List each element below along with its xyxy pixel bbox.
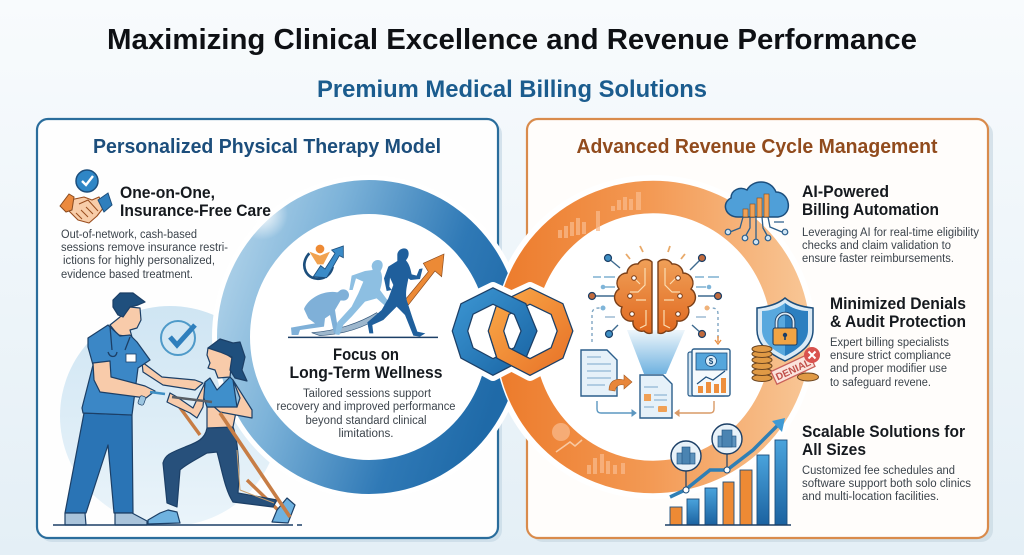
text: scalable solutions	[802, 423, 971, 503]
illustration: patient with resistance band	[148, 339, 295, 524]
ring: blue wellness cycle	[217, 180, 521, 494]
padlock	[776, 314, 794, 329]
subtitle: Premium Medical Billing Solutions	[317, 76, 707, 103]
brain circuits	[630, 268, 680, 328]
illustration: runners progress	[288, 248, 444, 337]
faint bars on ring	[552, 192, 641, 474]
text: scalable solutions: software support both solo clinics	[802, 478, 971, 490]
band handle	[137, 395, 146, 406]
denial stamp: DENIAL	[774, 358, 813, 383]
band front	[172, 397, 212, 402]
text: scalable solutions: Scalable Solutions for	[802, 423, 966, 441]
track swoosh	[312, 313, 381, 336]
heading: right panel: Advanced Revenue Cycle Management	[576, 136, 938, 158]
text: one-on-one care: sessions remove insurance restri-	[61, 242, 228, 254]
icon: shield with denial stamp	[752, 298, 820, 384]
text: minimized denials: to safeguard revene.	[830, 377, 931, 389]
far arm	[212, 380, 252, 418]
panel: personalized physical therapy model	[37, 119, 502, 542]
hair	[113, 293, 145, 317]
text: AI billing automation	[802, 183, 979, 265]
text: one-on-one care: Out-of-network, cash-based	[61, 229, 197, 241]
text: AI billing automation: Billing Automation	[802, 201, 939, 219]
coins	[752, 346, 818, 382]
ring halos	[217, 180, 811, 494]
text: minimized denials: & Audit Protection	[830, 313, 966, 331]
text: AI billing automation: checks and claim validation to	[802, 240, 951, 252]
building pin large	[712, 424, 742, 454]
midriff	[207, 407, 237, 428]
text: AI billing automation: AI-Powered	[802, 183, 889, 201]
illustration backdrop circle	[60, 306, 280, 526]
trend arrow	[670, 425, 778, 497]
text: minimized denials: and proper modifier use	[830, 363, 947, 375]
icon: handshake with check badge	[60, 170, 112, 223]
text: one-on-one care: evidence based treatment.	[61, 269, 193, 281]
brain lobes	[615, 260, 652, 333]
text: one-on-one care: One-on-One,	[120, 184, 215, 202]
ring: orange revenue cycle	[495, 180, 811, 494]
text: minimized denials	[830, 295, 966, 389]
orange growth arrow	[405, 254, 444, 305]
hair and ponytail	[208, 339, 247, 381]
icon: source document	[581, 350, 636, 416]
text: AI billing automation: ensure faster reimbursements.	[802, 253, 954, 265]
text: long-term wellness: Long-Term Wellness	[290, 364, 442, 382]
light cone	[627, 330, 685, 374]
near arm	[167, 383, 205, 418]
icon: wellness emblem	[304, 245, 343, 279]
icon: revenue report: $	[709, 357, 714, 366]
icon: validated claim document	[640, 375, 672, 418]
neck and face	[110, 307, 141, 337]
text: minimized denials: Minimized Denials	[830, 295, 966, 313]
icon: interlocking chain links	[452, 288, 573, 375]
icon: revenue report	[675, 349, 730, 416]
legs	[65, 413, 133, 513]
chain halo	[452, 288, 573, 375]
check badge	[76, 170, 98, 192]
front shoe	[148, 510, 180, 524]
text: long-term wellness: recovery and improved performance	[276, 401, 456, 413]
middle runner	[335, 260, 387, 335]
stethoscope and badge	[108, 326, 130, 356]
building pin small	[671, 441, 701, 471]
heading: left panel: Personalized Physical Therapy Model	[93, 136, 441, 158]
sports top	[202, 377, 237, 407]
icon: AI brain with connectors	[588, 246, 722, 374]
text: long-term wellness: limitations.	[338, 428, 394, 440]
text: scalable solutions: All Sizes	[802, 441, 866, 459]
text: scalable solutions: Customized fee schedules and	[802, 465, 955, 477]
text: one-on-one care	[61, 184, 271, 281]
legs	[163, 427, 277, 507]
text: AI billing automation: Leveraging AI for real-time eligibility	[802, 227, 979, 239]
text: scalable solutions: and multi-location facilities.	[802, 491, 939, 503]
shoes	[65, 513, 147, 525]
text: minimized denials: Expert billing specialists	[830, 337, 949, 349]
lead runner	[367, 248, 425, 337]
connector lines	[592, 246, 721, 344]
shirt	[82, 325, 150, 415]
face	[207, 348, 232, 378]
rear shoe	[272, 498, 295, 523]
title: Maximizing Clinical Excellence and Revenue Performance	[107, 24, 917, 56]
text: one-on-one care: Insurance-Free Care	[120, 202, 271, 220]
text: minimized denials: ensure strict compliance	[830, 350, 951, 362]
bar chart: growth	[665, 418, 791, 525]
far arm	[142, 362, 203, 390]
text: long-term wellness	[276, 346, 456, 440]
text: long-term wellness: Focus on	[333, 346, 399, 364]
runners ground line	[288, 335, 438, 340]
text: long-term wellness: Tailored sessions support	[303, 388, 432, 400]
ground line	[53, 524, 302, 526]
circuit traces	[730, 217, 784, 240]
icon: check mark circle	[161, 321, 195, 355]
legging stripe	[237, 450, 274, 503]
shield	[757, 298, 813, 361]
crouching runner	[291, 289, 349, 335]
denied x badge	[804, 347, 820, 363]
near arm	[93, 361, 155, 398]
ring fade near text	[236, 188, 288, 240]
text: long-term wellness: beyond standard clinical	[306, 415, 426, 427]
text: one-on-one care: ictions for highly personalized,	[63, 255, 215, 267]
band back	[173, 398, 278, 510]
illustration: therapist	[65, 293, 203, 525]
icon: AI cloud	[725, 182, 788, 245]
panel: advanced revenue cycle management	[527, 119, 993, 542]
